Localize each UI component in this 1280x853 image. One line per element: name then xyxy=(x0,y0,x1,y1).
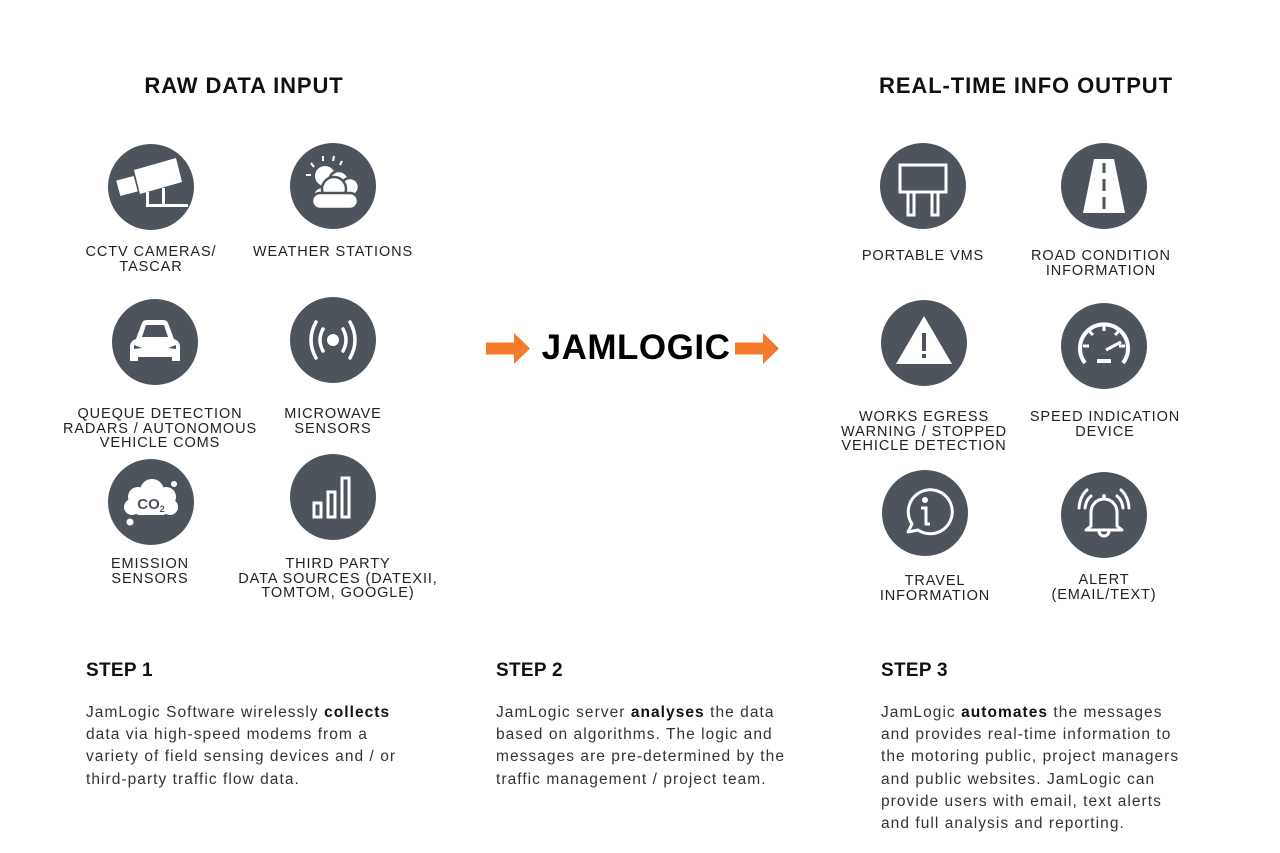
icon: cctv camera xyxy=(108,144,194,230)
step 3 text: JamLogic automates the messages xyxy=(881,704,1163,721)
step 1 text: third-party traffic flow data. xyxy=(86,771,300,788)
label: works egress: WARNING / STOPPED xyxy=(841,424,1007,440)
step 3 text xyxy=(881,704,1179,832)
label: queue detection: VEHICLE COMS xyxy=(100,435,220,451)
label: third party: DATA SOURCES (DATEXII, xyxy=(238,571,438,587)
heading: real-time info output: REAL-TIME INFO OUTPUT xyxy=(879,73,1173,98)
label: third party: TOMTOM, GOOGLE) xyxy=(261,585,415,601)
icon: co2 xyxy=(108,459,194,545)
label: emission xyxy=(111,556,189,587)
label: speed indication xyxy=(1030,409,1180,440)
label: emission: SENSORS xyxy=(111,571,189,587)
step 2 text: based on algorithms. The logic and xyxy=(496,726,773,743)
step 1 text xyxy=(86,704,396,788)
step 2 text: messages are pre-determined by the xyxy=(496,748,785,765)
icon: warning xyxy=(881,300,967,386)
icon: car xyxy=(112,299,198,385)
label: emission: EMISSION xyxy=(111,556,189,572)
label: microwave: MICROWAVE xyxy=(284,406,382,422)
icon: co2: 2 xyxy=(160,504,165,514)
arrow: left xyxy=(486,333,530,364)
icon: travel info xyxy=(882,470,968,556)
arrow: right xyxy=(735,333,779,364)
label: travel info xyxy=(880,573,990,604)
icon: microwave xyxy=(290,297,376,383)
label: third party xyxy=(238,556,438,601)
label: road condition xyxy=(1031,248,1171,279)
icon: co2: CO xyxy=(137,496,160,513)
label: speed indication: SPEED INDICATION xyxy=(1030,409,1180,425)
step 3 text: provide users with email, text alerts xyxy=(881,793,1162,810)
label: travel info: TRAVEL xyxy=(905,573,965,589)
label: works egress xyxy=(841,409,1007,454)
icon: road xyxy=(1061,143,1147,229)
label: queue detection xyxy=(63,406,257,451)
label: queue detection: RADARS / AUTONOMOUS xyxy=(63,421,257,437)
step 1 text: data via high-speed modems from a xyxy=(86,726,368,743)
label: cctv: CCTV CAMERAS/ xyxy=(86,244,216,260)
step 3 heading: STEP 3 xyxy=(881,660,948,681)
label: microwave: SENSORS xyxy=(294,421,372,437)
step 2 text xyxy=(496,704,785,788)
step 3 text: and provides real-time information to xyxy=(881,726,1171,743)
label: works egress: VEHICLE DETECTION xyxy=(841,438,1007,454)
step 3 text: the motoring public, project managers xyxy=(881,748,1179,765)
icon: portable vms xyxy=(880,143,966,229)
step 1 heading: STEP 1 xyxy=(86,660,153,681)
label: queue detection: QUEQUE DETECTION xyxy=(77,406,243,422)
label: travel info: INFORMATION xyxy=(880,588,990,604)
step 3 text: and full analysis and reporting. xyxy=(881,815,1125,832)
icon: alert bell xyxy=(1061,472,1147,558)
label: alert xyxy=(1051,572,1157,603)
step 1 text: JamLogic Software wirelessly collects xyxy=(86,704,390,721)
label: portable vms: PORTABLE VMS xyxy=(862,248,984,264)
step 2 text: JamLogic server analyses the data xyxy=(496,704,775,721)
label: cctv: TASCAR xyxy=(119,259,183,275)
label: alert: (EMAIL/TEXT) xyxy=(1051,587,1157,603)
icon: weather xyxy=(290,143,376,229)
label: third party: THIRD PARTY xyxy=(285,556,391,572)
label: road condition: INFORMATION xyxy=(1046,263,1156,279)
title: jamlogic: JAMLOGIC xyxy=(542,328,730,367)
step 1 text: variety of field sensing devices and / or xyxy=(86,748,396,765)
heading: raw data input: RAW DATA INPUT xyxy=(144,73,344,98)
icon: bar chart xyxy=(290,454,376,540)
label: speed indication: DEVICE xyxy=(1075,424,1135,440)
label: works egress: WORKS EGRESS xyxy=(859,409,989,425)
label: alert: ALERT xyxy=(1078,572,1129,588)
label: weather: WEATHER STATIONS xyxy=(253,244,413,260)
step 2 text: traffic management / project team. xyxy=(496,771,767,788)
icon: speedometer xyxy=(1061,303,1147,389)
label: road condition: ROAD CONDITION xyxy=(1031,248,1171,264)
label: microwave xyxy=(284,406,382,437)
step 2 heading: STEP 2 xyxy=(496,660,563,681)
step 3 text: and public websites. JamLogic can xyxy=(881,771,1155,788)
label: cctv xyxy=(86,244,216,275)
